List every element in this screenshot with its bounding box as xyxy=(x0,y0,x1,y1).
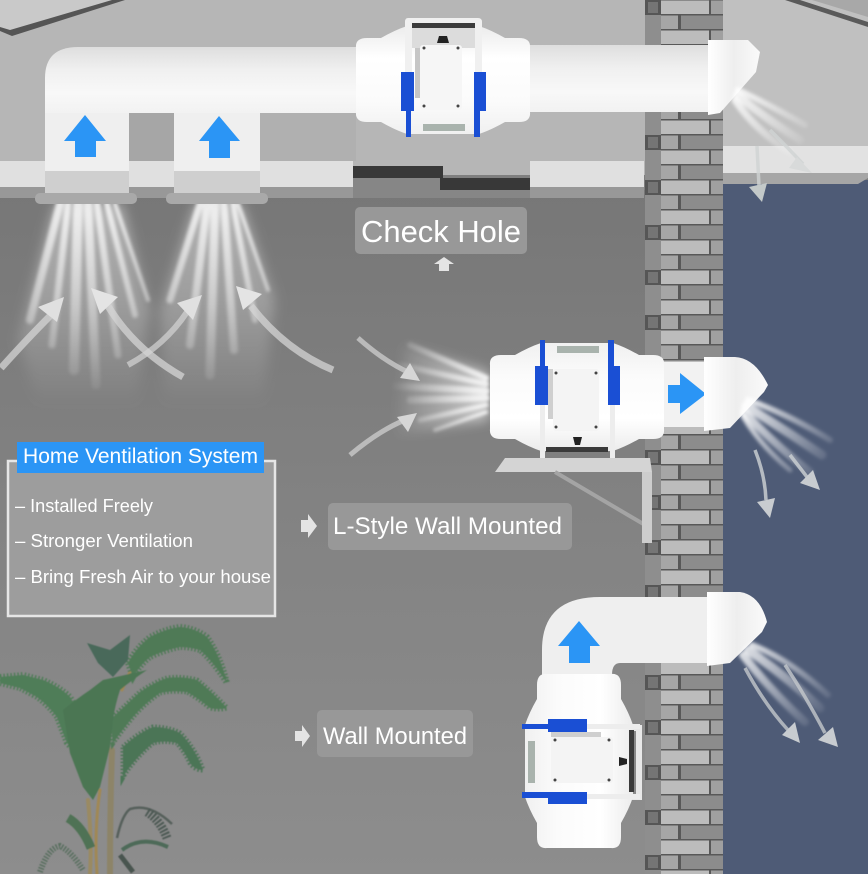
duct: top horizontal with legs xyxy=(45,47,360,193)
duct: outlet pipe top xyxy=(525,45,710,112)
label: wall mounted xyxy=(317,710,473,757)
label: L-style wall mounted: L-Style Wall Mounted xyxy=(333,513,562,540)
panel: room wall xyxy=(0,190,645,874)
brick wall xyxy=(645,0,723,874)
air arrows: outlet top xyxy=(749,130,812,202)
label: wall mounted: Wall Mounted xyxy=(323,723,467,750)
heading bar xyxy=(17,442,264,473)
label: L-style wall mounted xyxy=(328,503,572,550)
label: check hole: Check Hole xyxy=(361,214,521,249)
air spray: outlet middle xyxy=(743,400,830,472)
heading: Home Ventilation System xyxy=(23,445,258,468)
vent flanges xyxy=(35,193,268,204)
air spray: outlet top xyxy=(735,90,805,152)
arrows: blue up on legs xyxy=(64,115,240,158)
air haze: fan inlet xyxy=(395,345,488,435)
bracket: L-style xyxy=(495,458,652,543)
panel: home ventilation system xyxy=(8,442,275,616)
duct: outlet pipe middle xyxy=(660,362,710,427)
outlet hood: middle xyxy=(704,357,768,431)
bullet list: – Installed Freely xyxy=(15,496,153,516)
panel: attic wall xyxy=(0,0,645,175)
air arrows: outlet middle xyxy=(755,450,820,518)
frond: top leaf xyxy=(87,635,130,677)
air spray: fan inlet xyxy=(395,345,486,430)
panel: outside dark wall xyxy=(723,180,868,874)
air spray: outlet bottom xyxy=(743,645,828,722)
frond: lower right xyxy=(123,727,203,777)
frond: center mass xyxy=(63,670,147,800)
arrow: check hole xyxy=(434,257,454,271)
roof left xyxy=(0,0,125,36)
air arrows: room xyxy=(1,286,420,455)
fan: middle xyxy=(490,340,664,458)
arrow: wall mounted label xyxy=(295,725,310,747)
check hole opening xyxy=(353,166,530,198)
frond: middle right xyxy=(110,677,227,743)
roof right xyxy=(785,0,868,27)
plant: palm xyxy=(0,627,227,874)
bullet list: – Bring Fresh Air to your house xyxy=(15,567,271,587)
air haze: ceiling vents xyxy=(18,204,275,410)
fan: bottom xyxy=(522,674,642,848)
air arrows: outlet bottom xyxy=(745,665,838,747)
trunks xyxy=(88,672,130,874)
ceiling slab outside xyxy=(723,146,868,184)
fronds: lower small xyxy=(40,808,172,872)
outlet hood: top xyxy=(708,40,760,115)
label: check hole xyxy=(355,207,527,254)
bullet list xyxy=(15,496,271,587)
panel: outside sky upper xyxy=(723,0,868,150)
ceiling slab left xyxy=(0,161,353,198)
frond: left xyxy=(0,675,87,753)
ceiling slab middle xyxy=(530,161,644,198)
air spray: ceiling vents xyxy=(30,204,268,385)
outlet hood: bottom xyxy=(707,592,767,666)
fan: top xyxy=(356,18,530,137)
arrow: L-style label xyxy=(301,514,317,538)
bullet list: – Stronger Ventilation xyxy=(15,531,193,551)
duct: elbow bottom xyxy=(542,597,710,675)
frond: upper right xyxy=(128,627,227,683)
arrow: blue right xyxy=(668,373,706,414)
arrow: blue up xyxy=(558,621,600,663)
